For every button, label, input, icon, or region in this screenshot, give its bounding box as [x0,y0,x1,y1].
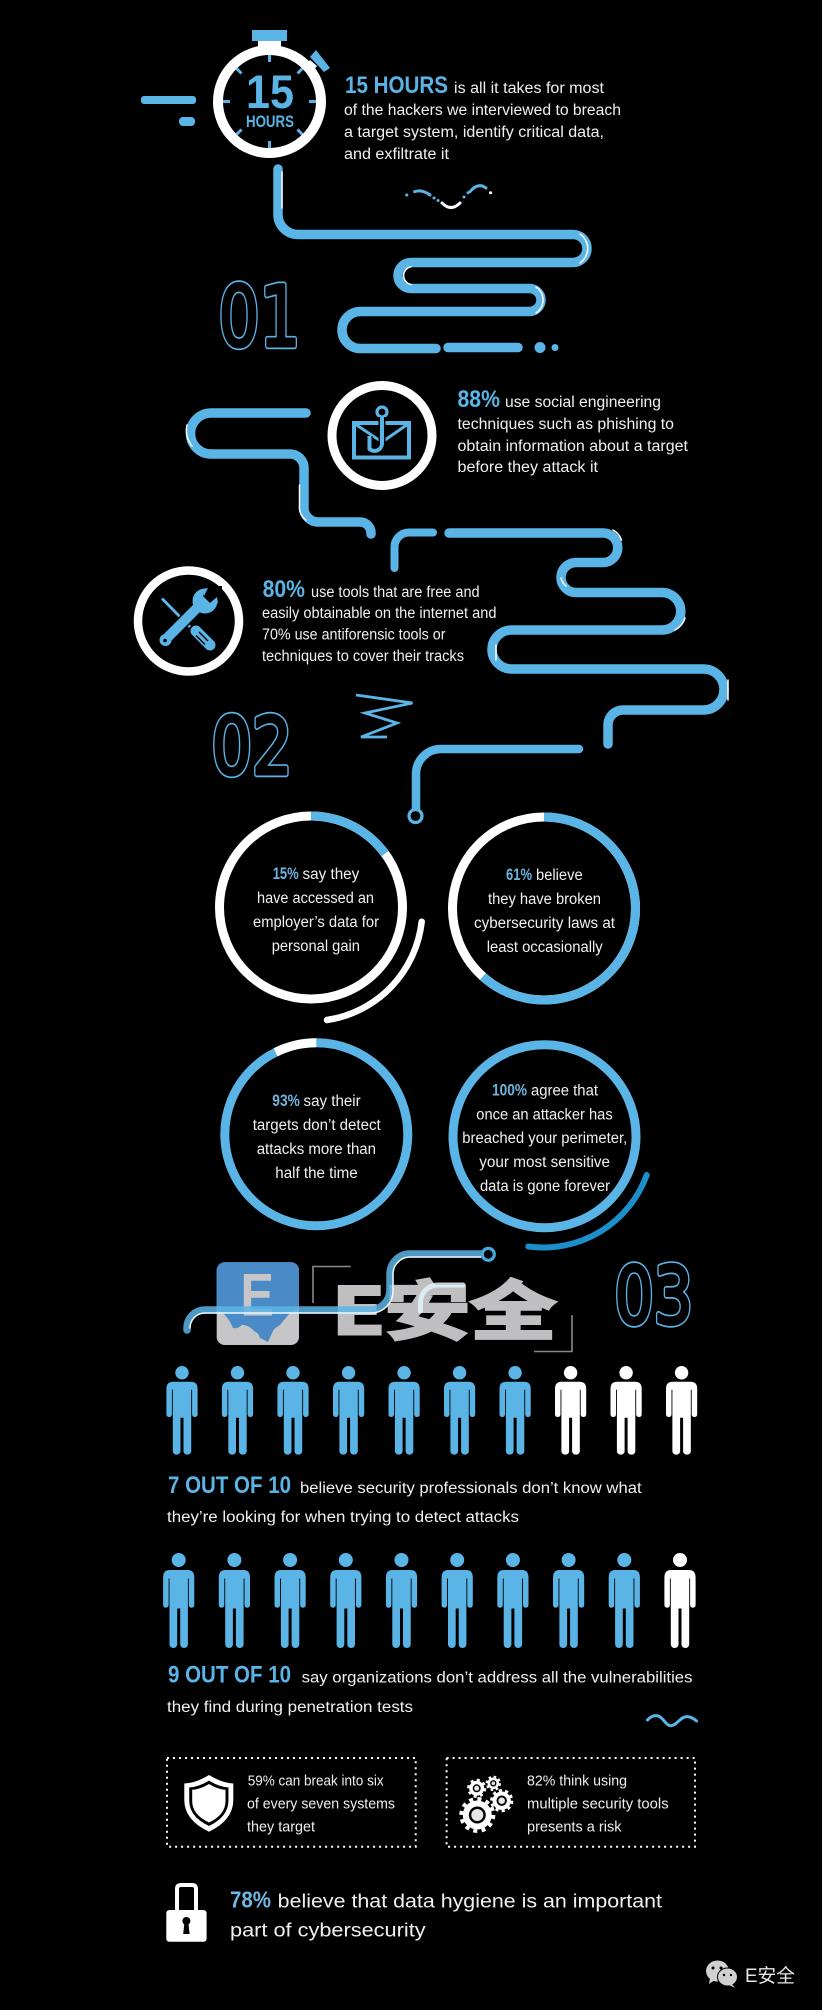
icon: gears [461,1777,512,1831]
panel: 82%: 82% think using [527,1773,627,1790]
donut: 93%: attacks more than [257,1141,376,1158]
donut: 15%: 15% [273,864,299,883]
pictogram row: 9 of 10 [163,1553,696,1648]
watermark logo [217,1261,572,1353]
text: 80%: techniques to cover their tracks [262,648,464,665]
donut: 93%: say their [304,1093,361,1110]
text: 80%: easily obtainable on the internet and [262,605,496,622]
section number 02: 02 [212,701,292,793]
donut: 61%: believe [536,867,583,884]
icon: wrench and screwdriver [138,570,239,672]
stopwatch icon [218,30,330,153]
section number 03: 03 [614,1250,693,1342]
icon: padlock [166,1885,207,1942]
donut: 93%: 93% [272,1091,300,1110]
brand label: E安全 [745,1965,795,1987]
donut: 100%: breached your perimeter, [462,1130,627,1147]
connector pipe 5 [409,749,579,822]
text: 15 hours: and exfiltrate it [344,146,450,163]
watermark logo: E安全 [332,1261,556,1353]
donut: 61%: they have broken [488,891,601,908]
text: 7 out of 10 [167,1472,642,1526]
speed lines [141,96,196,126]
icon: chat bubbles [706,1960,738,1988]
text: 88%: use social engineering [505,394,661,411]
text: 88% [458,386,689,476]
text: 9 out of 10: 9 OUT OF 10 [168,1662,291,1689]
zigzag decoration [356,695,412,737]
text: 80% [262,576,496,665]
section number 01: 01 [218,268,300,366]
icon: phishing hook and envelope [332,386,432,486]
watermark logo: E [240,1262,274,1329]
text: 80%: use tools that are free and [311,584,480,601]
text: 15 hours [344,72,621,163]
text: 15 hours: is all it takes for most [454,80,605,97]
connector pipe 3 [394,532,433,568]
donut: 100%: your most sensitive [479,1154,610,1171]
stopwatch icon: 15 [246,65,294,118]
text: 88%: obtain information about a target [458,438,689,455]
panel: 82%: multiple security tools [527,1795,669,1812]
donut: 93%: half the time [275,1165,358,1182]
squiggle decoration [407,186,491,208]
text: 15 hours: a target system, identify critical data, [344,124,604,141]
text: 88%: 88% [458,386,500,413]
text: 7 out of 10: they’re looking for when trying to detect attacks [167,1509,519,1526]
text: 7 out of 10: believe security professionals don’t know what [300,1480,642,1497]
section number 01: 01 [218,268,300,366]
donut: 100%: once an attacker has [476,1106,613,1123]
donut: 15%: have accessed an [257,890,374,907]
connector pipe 2 [186,413,371,534]
connector pipe 1 [278,169,588,353]
stopwatch icon: HOURS [246,112,294,131]
donut: 100%: agree that [531,1082,599,1099]
accent arc: dark blue [528,1175,647,1248]
section number 03: 03 [614,1250,693,1342]
connector pipe 6 [187,1248,494,1330]
text: 78%: 78% [230,1886,271,1912]
text: 15 hours: 15 HOURS [345,72,448,99]
donut: 93% [225,1043,408,1226]
section number 02: 02 [212,701,292,793]
text: 78% [230,1886,663,1942]
text: 80%: 80% [263,576,305,603]
icon: shield [184,1775,233,1832]
accent arc: white [327,922,422,1020]
text: 7 out of 10: 7 OUT OF 10 [168,1472,291,1499]
panel: 59%: of every seven systems [247,1795,395,1812]
donut: 100%: data is gone forever [480,1178,610,1195]
panel: 59% [167,1758,416,1847]
text: 88%: techniques such as phishing to [458,416,674,433]
donut: 61%: 61% [506,865,532,884]
text: 9 out of 10: they find during penetration tests [167,1699,413,1716]
donut: 100% [453,1045,636,1228]
text: 78%: part of cybersecurity [230,1921,426,1942]
text: 15 hours: of the hackers we interviewed to breach [344,102,621,119]
donut: 15%: personal gain [272,938,360,955]
panel: 59%: they target [247,1818,316,1835]
text: 9 out of 10: say organizations don’t address all the vulnerabilities [302,1670,693,1687]
donut: 15%: employer’s data for [253,914,379,931]
donut: 61%: cybersecurity laws at [474,915,616,932]
text: 88%: before they attack it [458,459,599,476]
panel: 82% [447,1758,695,1847]
donut: 93%: targets don’t detect [253,1117,381,1134]
wave decoration [648,1716,696,1726]
donut: 61%: least occasionally [487,939,603,956]
text: 80%: 70% use antiforensic tools or [262,626,446,644]
donut: 15% [220,816,402,999]
text: 78%: believe that data hygiene is an important [278,1891,663,1912]
text: 9 out of 10 [167,1662,693,1716]
connector pipe 4 [449,530,728,744]
donut: 61% [452,817,636,1000]
panel: 82%: presents a risk [527,1818,622,1835]
donut: 15%: say they [302,866,360,883]
panel: 59%: 59% can break into six [248,1773,384,1790]
pictogram row: 7 of 10 [166,1366,697,1455]
donut: 100%: 100% [492,1080,527,1099]
